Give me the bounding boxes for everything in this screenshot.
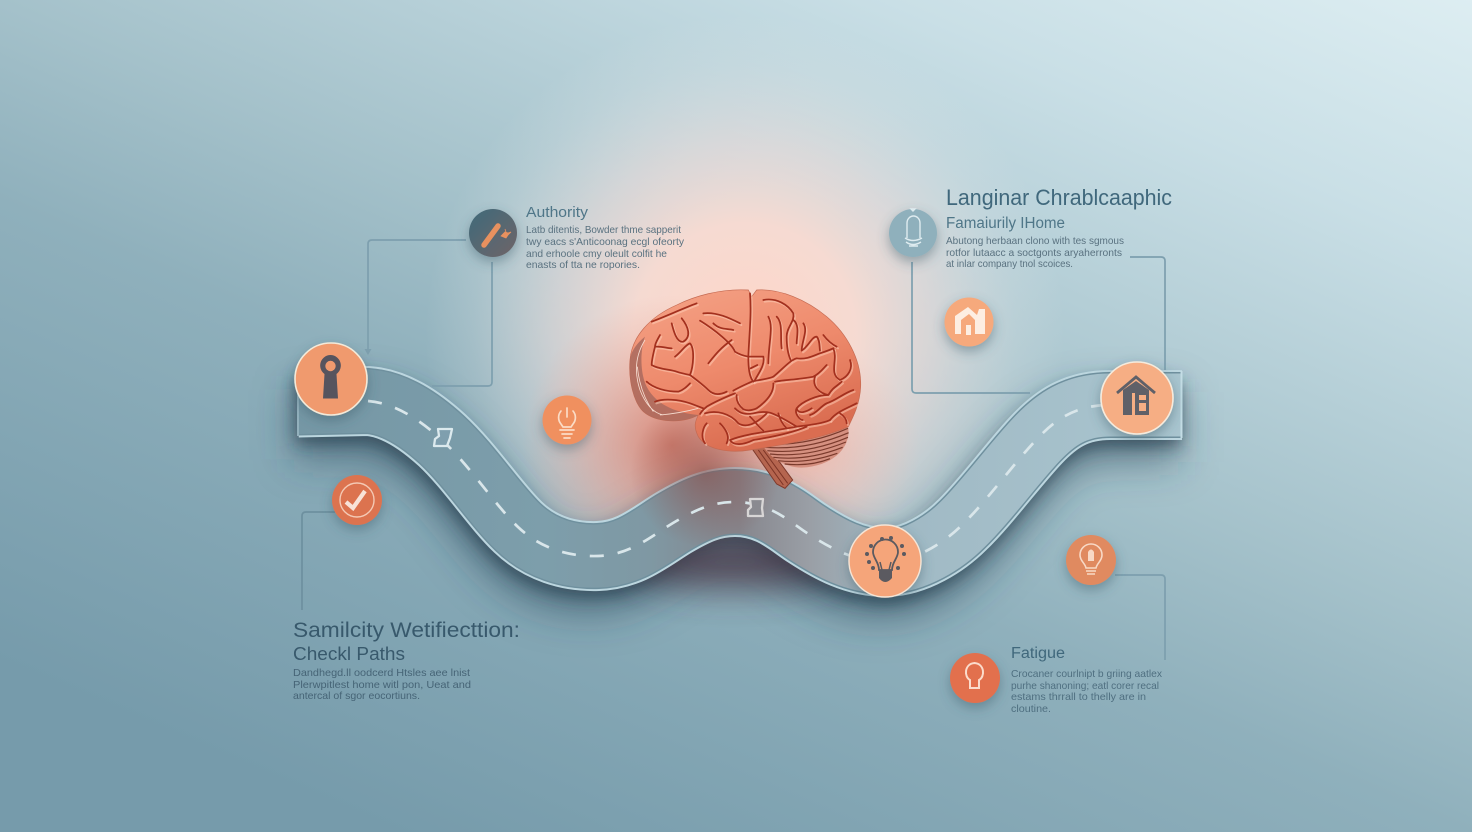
- body: fatigue: Crocaner courlnipt b griing aatlex: [1011, 669, 1162, 680]
- body: fatigue: purhe shanoning; eatl corer recal: [1011, 681, 1159, 692]
- icon: keyhole: [320, 355, 341, 398]
- node: house: [1101, 362, 1173, 434]
- icon: lightbulb with rays: [865, 536, 906, 582]
- body: top right: at inlar company tnol scoices.: [946, 259, 1073, 270]
- heading: bottom left title: Samilcity Wetifiecttion:: [293, 619, 520, 642]
- node: right lightbulb: [1066, 535, 1116, 585]
- node: keyhole: [295, 343, 367, 415]
- gyri highlight: [648, 295, 858, 446]
- text block: top right: [946, 185, 1172, 270]
- connector lines: [302, 240, 1165, 660]
- road marker centre: [748, 499, 763, 516]
- heading: authority: Authority: [526, 205, 589, 221]
- cerebrum: [630, 290, 861, 451]
- winding road: [298, 368, 1182, 562]
- road shadow: [294, 410, 1180, 588]
- body: fatigue: [1011, 669, 1162, 715]
- body: authority: and erhoole cmy oleult colfit he: [526, 249, 667, 260]
- node: check: [332, 475, 382, 525]
- brain stem: [751, 447, 793, 488]
- icon: bulb: [559, 408, 575, 438]
- road marker left: [434, 429, 452, 446]
- body: fatigue: estams thrrall to thelly are in: [1011, 692, 1146, 703]
- body: authority: twy eacs s'Anticoonag ecgl ofeorty: [526, 237, 685, 248]
- body: top right: rotfor lutaacc a soctgonts aryaherronts: [946, 248, 1122, 259]
- node: authority: [469, 209, 517, 257]
- text block: fatigue: [1011, 645, 1162, 715]
- heading: top right title: Langinar Chrablcaaphic: [946, 185, 1172, 210]
- body: bottom left: antercal of sgor eocortiuns.: [293, 691, 420, 702]
- node: small lightbulb: [542, 396, 592, 444]
- subheading: bottom left: Checkl Paths: [293, 643, 405, 664]
- body: bottom left: [293, 668, 471, 702]
- icon: bulb: [1080, 544, 1102, 574]
- body: bottom left: Dandhegd.ll oodcerd Htsles aee lnist: [293, 668, 470, 679]
- node: pale lamp: [889, 209, 937, 257]
- text block: bottom left: [293, 619, 520, 702]
- body: top right: Abutong herbaan clono with tes sgmous: [946, 236, 1124, 247]
- body: top right: [946, 236, 1124, 270]
- icon: capsule lamp: [905, 209, 922, 246]
- body: fatigue: cloutine.: [1011, 704, 1051, 715]
- icon: mushroom shape: [966, 663, 983, 688]
- sulci: [647, 293, 857, 444]
- icon: house: [1117, 377, 1155, 415]
- icon: check mark: [346, 491, 365, 508]
- node: building: [944, 298, 994, 346]
- body: bottom left: Plerwpitlest home witl pon, Ueat and: [293, 680, 471, 691]
- body: authority: [526, 225, 685, 271]
- node: fatigue: [950, 653, 1000, 703]
- icon: building: [955, 307, 985, 335]
- body: authority: Latb ditentis, Bowder thme sapperit: [526, 225, 681, 236]
- heading: fatigue: Fatigue: [1011, 645, 1065, 662]
- lower left shading: [630, 337, 698, 421]
- body: authority: enasts of tta ne ropories.: [526, 260, 640, 271]
- brain: [630, 290, 861, 488]
- text block: authority: [526, 205, 685, 271]
- lane dashes: [368, 401, 1110, 562]
- subheading: top right: Famaiurily IHome: [946, 215, 1065, 232]
- node: big lightbulb: [849, 525, 921, 597]
- brain glow: [452, 66, 1027, 526]
- icon: tool: [484, 226, 498, 245]
- cerebellum: [762, 424, 849, 468]
